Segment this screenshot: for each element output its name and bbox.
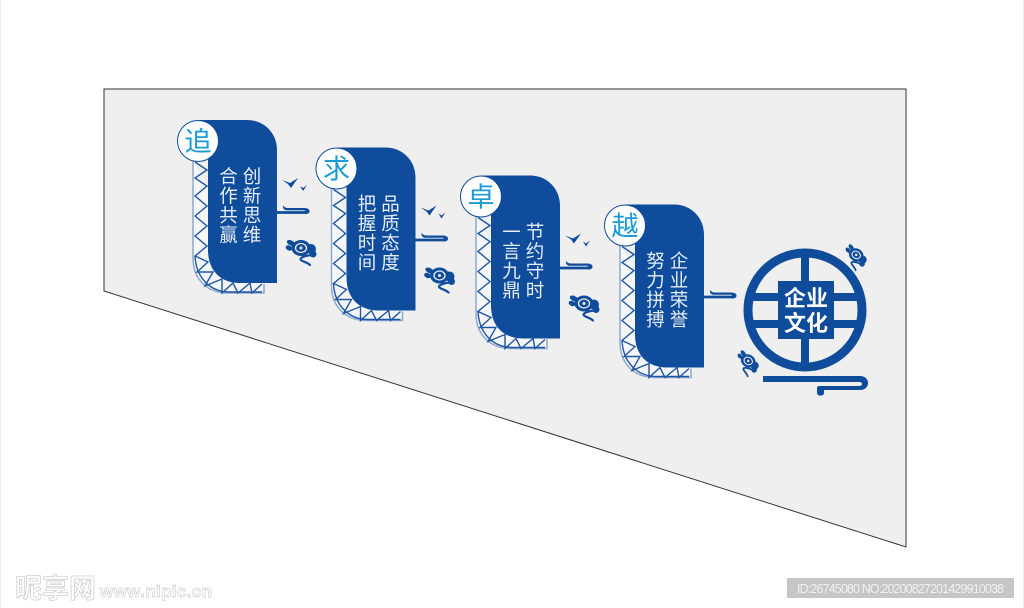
cloud: emblem top right [838, 242, 871, 273]
emblem: 企业文化: 文化 [784, 311, 828, 336]
image id bar [787, 578, 1014, 598]
card 1: 追: 赢 [219, 224, 238, 246]
card 1: 追: 思 [243, 205, 261, 226]
cloud: emblem bottom left [730, 348, 763, 379]
watermark logo: 昵享网 [15, 574, 96, 604]
watermark url: www.nipic.cn [99, 582, 212, 601]
card 1: 追: 追 [184, 127, 212, 157]
card 4: 越: 努 [646, 250, 665, 272]
card 1: 追 [178, 120, 316, 293]
card 2: 求: 求 [323, 154, 350, 184]
card 1: 追: 新 [243, 186, 261, 206]
card 4: 越 [604, 204, 736, 378]
card 2: 求: 握 [358, 213, 376, 234]
card 2: 求: 质 [381, 213, 400, 234]
wall panel [104, 89, 906, 547]
card 3: 卓: 言 [502, 241, 521, 262]
emblem: 企业文化 [748, 253, 862, 367]
card 4: 越: 搏 [646, 309, 665, 330]
card 3: 卓: 卓 [468, 182, 494, 212]
card 3: 卓: 时 [526, 280, 544, 301]
card 4: 越: 力 [646, 270, 665, 291]
card 1: 追: 作 [219, 186, 238, 206]
card 2: 求: 把 [358, 194, 376, 214]
card 3: 卓: 一 [502, 222, 521, 242]
card 1: 追: 维 [243, 224, 261, 246]
card 3: 卓: 九 [502, 260, 521, 282]
flourish under emblem [763, 376, 868, 396]
card 1: 追: 合 [219, 166, 238, 187]
card 4: 越: 越 [612, 212, 638, 242]
card 3: 卓: 约 [526, 241, 544, 262]
card 4: 越: 誉 [670, 309, 688, 330]
card 3: 卓: 守 [526, 260, 544, 282]
card 1: 追: 创 [243, 166, 261, 187]
card 2: 求: 间 [358, 252, 376, 273]
card 4: 越: 拼 [646, 290, 665, 310]
card 2: 求: 时 [358, 232, 376, 254]
card 4: 越: 企 [670, 250, 688, 272]
card 3: 卓: 鼎 [502, 280, 521, 301]
card 3: 卓 [460, 176, 600, 348]
card 2: 求: 度 [381, 252, 400, 273]
image id bar: ID:26745080 NO:20200827201429910038 [797, 582, 1004, 596]
card 4: 越: 业 [670, 270, 688, 291]
emblem: 企业文化: 企业 [784, 286, 828, 311]
card 2: 求: 品 [381, 194, 400, 214]
card 1: 追: 共 [219, 205, 238, 226]
card 2: 求: 态 [381, 232, 400, 254]
card 3: 卓: 节 [526, 222, 544, 242]
card 2: 求 [316, 148, 455, 320]
card 4: 越: 荣 [670, 290, 688, 310]
